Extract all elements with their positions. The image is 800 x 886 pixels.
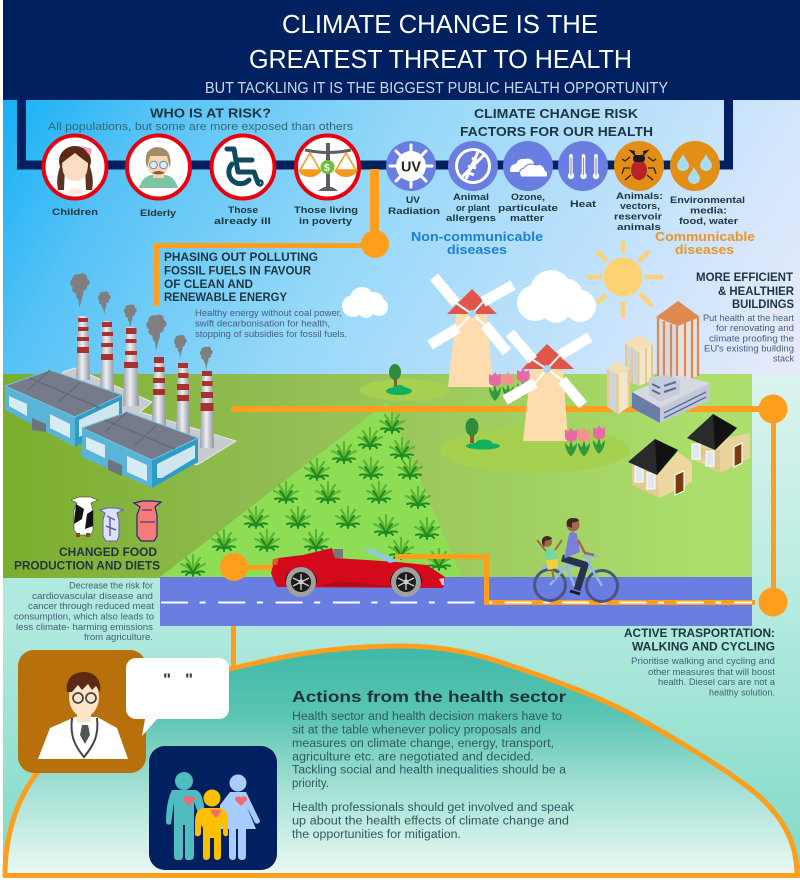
text: health sector body: Tackling social and health inequalities should be a [292, 764, 567, 776]
label: ozone: Ozone, [511, 192, 545, 203]
orange connector to fossil fuel panel [156, 169, 389, 306]
speech bubble: " " [163, 670, 193, 689]
text: active transport body: other measures that will boost [648, 667, 776, 677]
label: allergens: allergens [446, 213, 496, 224]
text: food body: Decrease the risk for [69, 580, 153, 590]
text: food body: cancer through reduced meat [28, 601, 155, 611]
heading: active transport [624, 626, 775, 654]
text: active transport body: Prioritise walking and cycling and [631, 656, 775, 666]
label: ozone [498, 192, 558, 224]
text: health sector body: agriculture etc. are negotiated and decided. [292, 752, 534, 764]
label: already ill [214, 205, 271, 227]
title: GREATEST THREAT TO HEALTH [249, 44, 632, 74]
road markings and lower connector lines [231, 600, 755, 668]
label: environmental media: media: [690, 206, 727, 216]
icon: big cloud [517, 270, 596, 323]
heading: active transport: ACTIVE TRASPORTATION: [624, 626, 775, 640]
panel: fossil fuels text: FOSSIL FUELS IN FAVOUR [164, 264, 311, 278]
label: environmental media: food, water [679, 216, 738, 227]
heading: who is at risk: WHO IS AT RISK? [150, 106, 271, 120]
label: ozone: particulate [498, 203, 558, 214]
text: active transport body: health. Diesel cars are not a [658, 677, 775, 687]
text: health sector body: measures on climate change, energy, transport, [292, 738, 554, 750]
label: allergens [446, 192, 496, 224]
icon: cows [71, 497, 161, 541]
icon: UV: UV [401, 158, 421, 176]
heading: food [14, 545, 160, 572]
text: health sector body: up about the health effects of climate change and [292, 816, 569, 828]
mid connector line [231, 406, 761, 412]
platforms [60, 368, 236, 465]
label: allergens: Animal [453, 192, 489, 203]
icon: red car [271, 548, 445, 597]
label: communicable diseases: Communicable [655, 229, 755, 244]
label: UV radiation [388, 195, 440, 217]
green ground [3, 374, 752, 578]
heading: risk factors: CLIMATE CHANGE RISK [474, 106, 639, 121]
icon: allergens [448, 141, 498, 191]
label: already ill: Those [228, 205, 258, 216]
label: ozone: matter [510, 213, 544, 224]
heading: buildings: stack [773, 354, 794, 364]
icon: children [44, 136, 106, 198]
hearts [183, 796, 247, 818]
icon: scales [296, 136, 359, 198]
text: health sector body: Health professionals should get involved and speak [292, 802, 574, 814]
child [195, 790, 228, 860]
label: elderly: Elderly [140, 208, 177, 219]
icon: family [149, 746, 277, 870]
road centre line [161, 602, 752, 604]
heading: risk factors [460, 106, 653, 139]
factory building back [5, 370, 122, 447]
hill panel: health sector [5, 646, 797, 876]
label: UV radiation: UV [406, 195, 421, 206]
panel: fossil fuels text: PHASING OUT POLLUTING [164, 250, 318, 264]
label: non-communicable diseases [411, 229, 543, 257]
lower background [3, 375, 800, 878]
text: food body [14, 580, 155, 642]
connector line over car [395, 556, 486, 605]
label: environmental media: Environmental [670, 195, 745, 206]
label: UV radiation: Radiation [388, 206, 440, 217]
text: active transport body: healthy solution. [709, 688, 775, 698]
title [249, 9, 632, 74]
panel: fossil fuels text [164, 250, 347, 339]
speech bubble [126, 658, 229, 736]
label: vectors: reservoir [614, 212, 662, 222]
label: poverty: in poverty [299, 216, 353, 227]
heading: active transport: WALKING AND CYCLING [632, 640, 775, 654]
text: active transport body [631, 656, 776, 698]
icon: doctor [18, 650, 146, 773]
icon: scales: $ [324, 163, 330, 174]
icon: power plant [5, 273, 236, 488]
heading: who is at risk: All populations, but some are more exposed than others [48, 121, 354, 133]
connector column right [758, 394, 788, 616]
panel: fossil fuels text: RENEWABLE ENERGY [164, 290, 287, 304]
chimneys and smoke back row [70, 273, 139, 406]
heading: buildings: BUILDINGS [732, 297, 794, 311]
label: vectors: Animals: [616, 191, 663, 202]
heading: who is at risk [48, 106, 354, 133]
label: poverty: Those living [294, 205, 358, 216]
icon: water drops [670, 141, 720, 191]
label: vectors: animals [617, 222, 661, 233]
icon: tulips back [489, 368, 529, 401]
panel: fossil fuels text: OF CLEAN AND [164, 277, 253, 291]
factory building front [82, 412, 198, 488]
icon: UV [386, 141, 436, 191]
sky background [3, 100, 800, 376]
label: non-communicable diseases: Non-communicable [411, 229, 543, 244]
label: vectors: vectors, [620, 201, 660, 212]
road [160, 577, 752, 626]
heading: food: PRODUCTION AND DIETS [14, 558, 160, 572]
icon: houses [628, 414, 750, 498]
heading: buildings: & HEALTHIER [718, 284, 794, 298]
man [166, 772, 204, 860]
text: health sector body [292, 711, 574, 841]
navy connector frame [22, 100, 728, 165]
icon: left connector dot [220, 553, 274, 581]
heading: buildings: for renovating and [716, 323, 794, 333]
subtitle: BUT TACKLING IT IS THE BIGGEST PUBLIC HEALTH OPPORTUNITY [205, 80, 668, 97]
icon: trees [386, 364, 500, 450]
panel: fossil fuels text: stopping of subsidies for fossil fuels. [195, 329, 347, 339]
heading: buildings: Put health at the heart [703, 313, 794, 323]
heading: food: CHANGED FOOD [59, 545, 157, 559]
header banner [3, 0, 800, 100]
label: children: Children [52, 207, 98, 218]
woman [220, 774, 260, 860]
label: vectors [614, 191, 663, 233]
heading: buildings: EU's existing building [704, 344, 794, 354]
heading: buildings: MORE EFFICIENT [696, 270, 794, 284]
icon: small cloud [342, 287, 388, 318]
panel: fossil fuels text: Healthy energy without coal power, [195, 308, 342, 318]
icon: cyclists [534, 518, 618, 602]
label: heat: Heat [570, 199, 597, 210]
label: environmental media [670, 195, 745, 227]
right strip [752, 375, 800, 630]
text: food body: from agriculture. [84, 632, 153, 642]
text: food body: consumption, which also leads to [14, 612, 154, 622]
text: food body: cardiovascular disease and [32, 591, 153, 601]
title: CLIMATE CHANGE IS THE [282, 9, 598, 39]
text: health sector body: Health sector and health decision makers have to [292, 711, 562, 723]
heading: buildings [696, 270, 794, 364]
icon: elderly [127, 136, 190, 198]
icon: ozone clouds [503, 141, 553, 191]
meadow patches [360, 379, 630, 473]
planted field [160, 402, 462, 577]
icon: sun [587, 241, 663, 318]
label: poverty [294, 205, 358, 227]
label: communicable diseases: diseases [675, 242, 734, 257]
heading: buildings: climate proofing the [709, 334, 794, 344]
label: communicable diseases [655, 229, 755, 257]
icon: city buildings [607, 301, 710, 423]
icon: beetle [614, 141, 664, 191]
chimneys and smoke front row [146, 315, 214, 448]
panel: fossil fuels text: swift decarbonisation for health, [195, 318, 330, 328]
label: allergens: or plant [456, 203, 491, 214]
icon: windmill back [430, 277, 513, 387]
icon: tulips front [565, 425, 605, 456]
label: already ill: already ill [214, 216, 271, 227]
text: health sector body: sit at the table whenever policy proposals and [292, 724, 541, 736]
icon: heat thermometers [558, 141, 608, 191]
heading: actions from the health sector: Actions from the health sector [292, 689, 566, 706]
heading: risk factors: FACTORS FOR OUR HEALTH [460, 124, 653, 139]
text: health sector body: the opportunities for mitigation. [292, 829, 461, 841]
text: health sector body: priority. [292, 778, 329, 790]
icon: wheelchair [212, 136, 274, 198]
label: non-communicable diseases: diseases [447, 242, 507, 257]
text: food body: less climate- harming emissions [16, 622, 154, 632]
icon: windmill front [505, 333, 590, 441]
